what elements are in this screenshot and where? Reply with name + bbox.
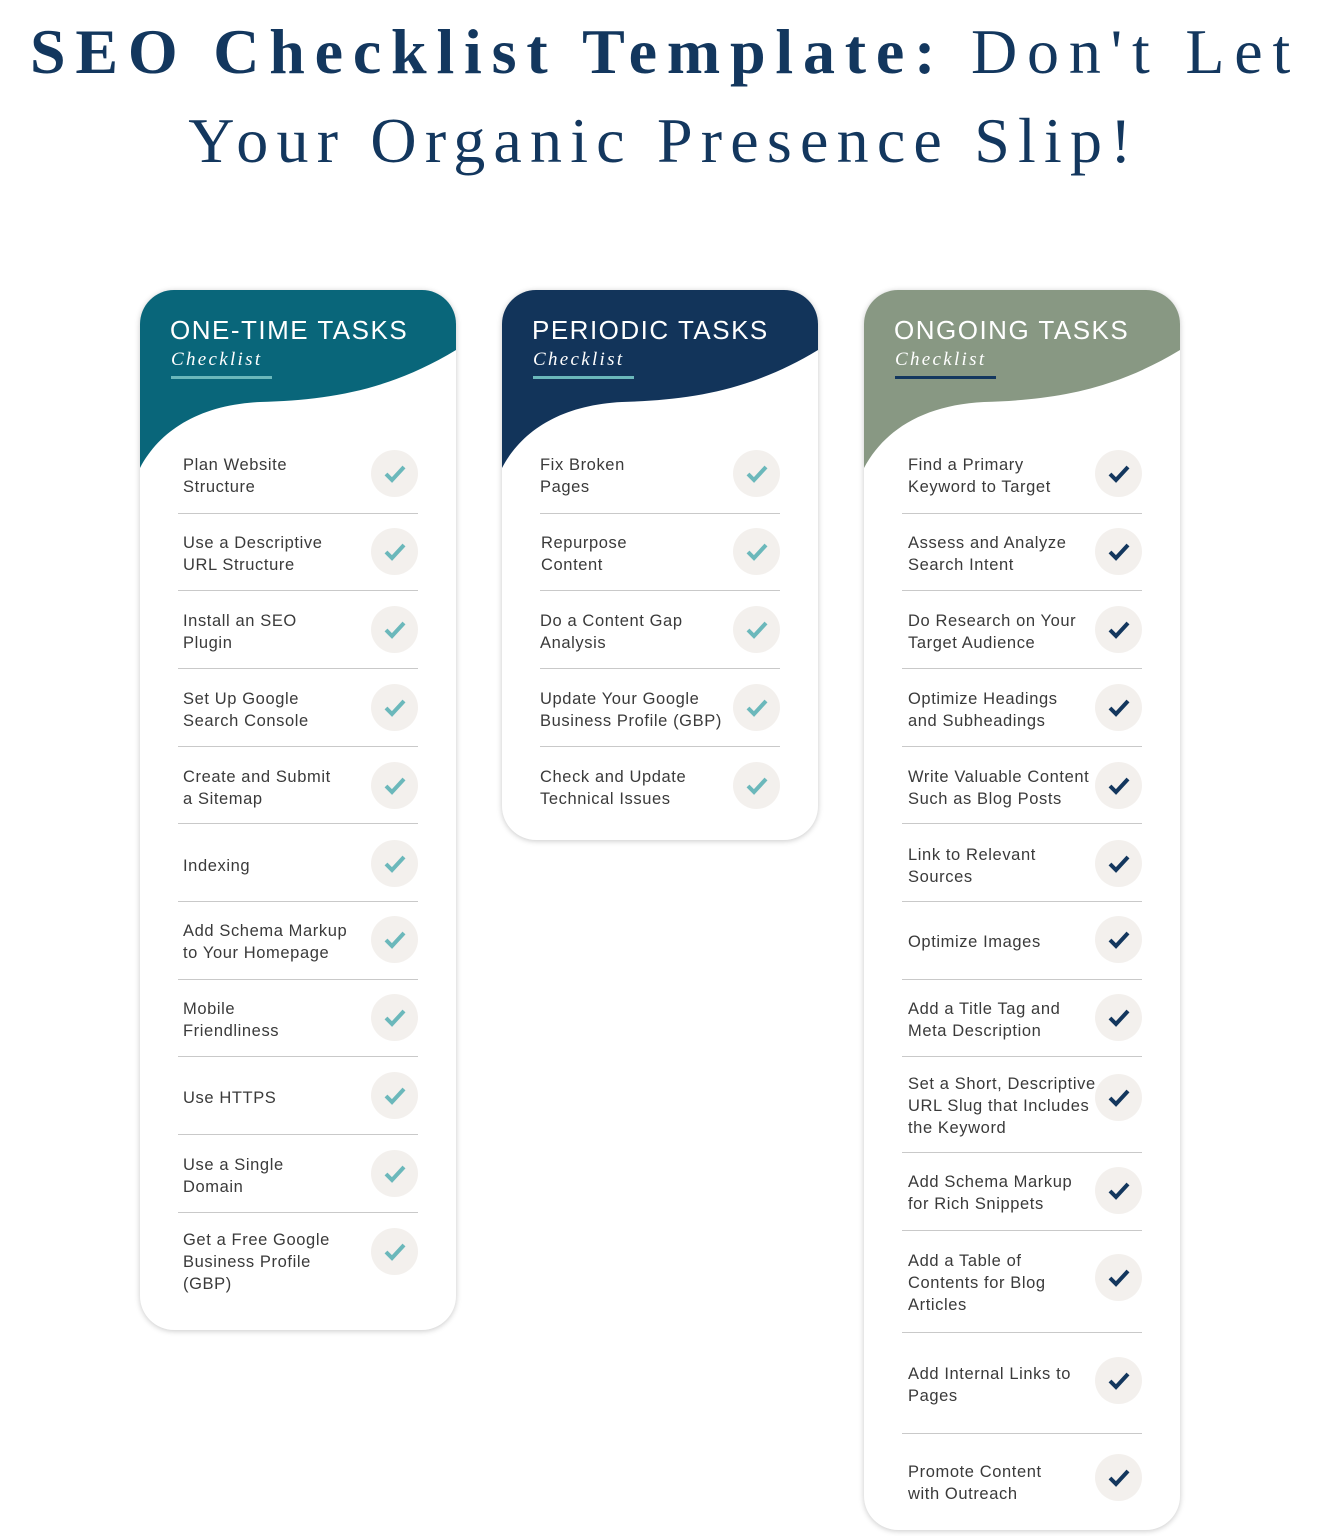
item xyxy=(540,762,780,809)
heading: ONE-TIME TASKS xyxy=(170,315,408,345)
item: and Subheadings xyxy=(908,712,1045,730)
item: Business Profile xyxy=(183,1253,311,1271)
item: Plan Website xyxy=(183,456,287,474)
header wave xyxy=(502,290,818,468)
item xyxy=(183,1228,418,1293)
item: Domain xyxy=(183,1178,243,1196)
item xyxy=(908,450,1142,497)
header wave xyxy=(864,290,1180,468)
item: the Keyword xyxy=(908,1119,1006,1137)
panel: periodic tasks xyxy=(502,290,818,840)
item: Search Intent xyxy=(908,556,1014,574)
item: Articles xyxy=(908,1296,967,1314)
item: Pages xyxy=(908,1386,958,1404)
item: Create and Submit xyxy=(183,768,331,786)
item: Find a Primary xyxy=(908,456,1024,474)
item: Assess and Analyze xyxy=(908,534,1066,552)
item: URL Slug that Includes xyxy=(908,1097,1089,1115)
item: Write Valuable Content xyxy=(908,768,1089,786)
item: Mobile xyxy=(183,1000,235,1018)
item: Set Up Google xyxy=(183,690,299,708)
item: to Your Homepage xyxy=(183,944,329,962)
panel: periodic tasks: Checklist xyxy=(533,349,624,370)
item: Get a Free Google xyxy=(183,1231,330,1249)
item: Meta Description xyxy=(908,1022,1041,1040)
title: Your Organic Presence Slip! xyxy=(188,105,1140,176)
item: Plugin xyxy=(183,634,232,652)
panel: one-time tasks xyxy=(140,290,456,1330)
item: Use a Descriptive xyxy=(183,534,322,552)
item: Link to Relevant xyxy=(908,846,1036,864)
item: Structure xyxy=(183,478,255,496)
item xyxy=(183,606,418,653)
item: (GBP) xyxy=(183,1275,232,1293)
item: Friendliness xyxy=(183,1022,279,1040)
panel: ongoing tasks: Checklist xyxy=(895,349,986,370)
item: Pages xyxy=(540,478,590,496)
item: Add Schema Markup xyxy=(908,1173,1072,1191)
panel: ongoing tasks xyxy=(864,290,1180,1530)
title xyxy=(30,16,1300,176)
item xyxy=(908,1074,1142,1137)
item: Analysis xyxy=(540,634,606,652)
item: Add a Table of xyxy=(908,1252,1022,1270)
item xyxy=(908,1252,1142,1314)
item: Install an SEO xyxy=(183,612,297,630)
item xyxy=(908,840,1142,887)
item: Update Your Google xyxy=(540,690,699,708)
item xyxy=(540,450,780,497)
item: Search Console xyxy=(183,712,309,730)
item: Check and Update xyxy=(540,768,686,786)
item xyxy=(183,684,418,731)
item xyxy=(183,1150,418,1197)
item: Optimize Headings xyxy=(908,690,1058,708)
item xyxy=(183,994,418,1041)
item: Do a Content Gap xyxy=(540,612,683,630)
item xyxy=(540,606,780,653)
item xyxy=(908,1167,1142,1214)
item: Add Internal Links to xyxy=(908,1364,1071,1382)
item: Set a Short, Descriptive xyxy=(908,1075,1096,1093)
item xyxy=(183,450,418,497)
item: Add Schema Markup xyxy=(183,922,347,940)
item: Indexing xyxy=(183,857,250,875)
item: URL Structure xyxy=(183,556,295,574)
item xyxy=(908,916,1142,963)
heading: ONGOING TASKS xyxy=(894,315,1129,345)
item: Sources xyxy=(908,868,973,886)
item xyxy=(908,1454,1142,1503)
item xyxy=(908,606,1142,653)
item: a Sitemap xyxy=(183,790,263,808)
header wave xyxy=(140,290,456,468)
item: Contents for Blog xyxy=(908,1274,1046,1292)
item xyxy=(541,528,780,575)
item: Add a Title Tag and xyxy=(908,1000,1060,1018)
item: for Rich Snippets xyxy=(908,1195,1044,1213)
item: Business Profile (GBP) xyxy=(540,712,722,730)
item: Fix Broken xyxy=(540,456,625,474)
heading: PERIODIC TASKS xyxy=(532,315,769,345)
item xyxy=(908,1357,1142,1404)
item xyxy=(183,528,418,575)
item xyxy=(908,684,1142,731)
item: Target Audience xyxy=(908,634,1035,652)
item: Repurpose xyxy=(541,534,627,552)
item: Keyword to Target xyxy=(908,478,1051,496)
item xyxy=(183,840,418,887)
item: Content xyxy=(541,556,603,574)
item xyxy=(540,684,780,731)
item: Use HTTPS xyxy=(183,1089,276,1107)
item: Use a Single xyxy=(183,1156,284,1174)
item: Such as Blog Posts xyxy=(908,790,1062,808)
item xyxy=(183,762,418,809)
item xyxy=(908,762,1142,809)
item: Technical Issues xyxy=(540,790,671,808)
item: with Outreach xyxy=(908,1485,1018,1503)
title: SEO Checklist Template: Don't Let xyxy=(30,16,1300,87)
panel: one-time tasks: Checklist xyxy=(171,349,262,370)
item xyxy=(908,528,1142,575)
item: Optimize Images xyxy=(908,933,1041,951)
item xyxy=(908,994,1142,1041)
item xyxy=(183,1072,418,1119)
item: Promote Content xyxy=(908,1463,1042,1481)
item: Do Research on Your xyxy=(908,612,1076,630)
item xyxy=(183,916,418,963)
